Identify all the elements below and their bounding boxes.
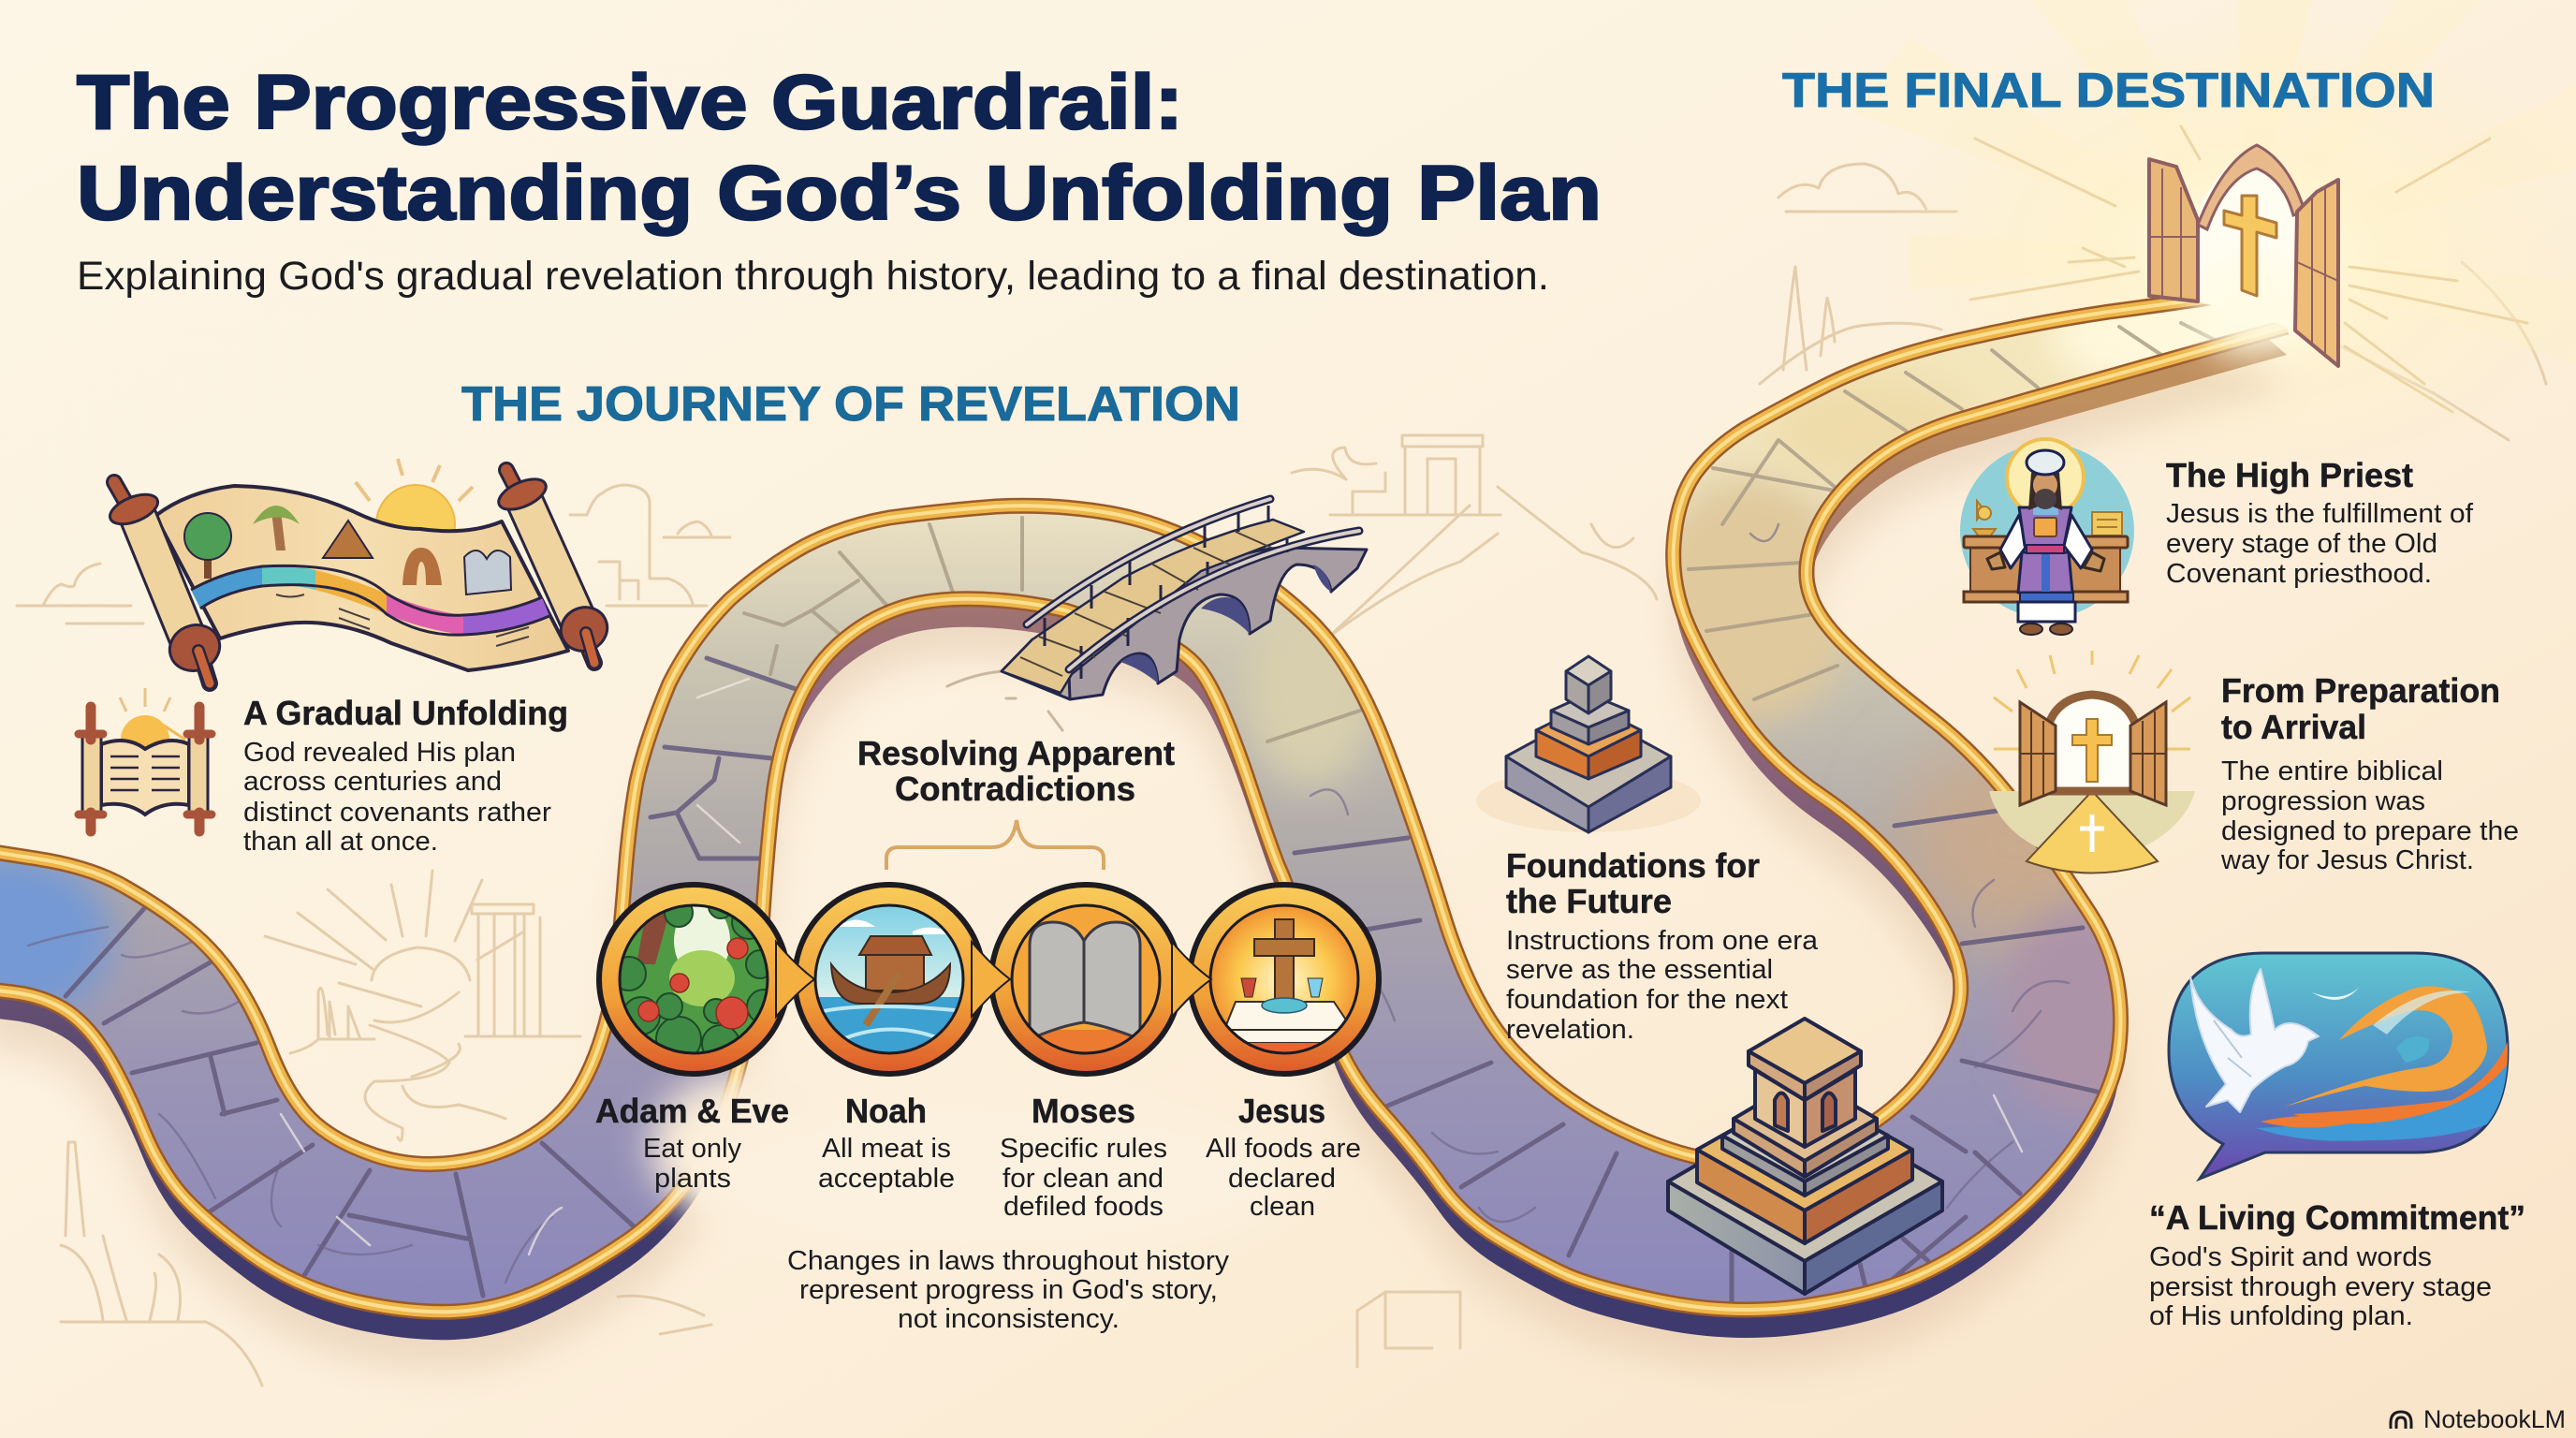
text block: the high priest: every stage of the Old: [2166, 529, 2437, 559]
NotebookLM watermark: NotebookLM: [2423, 1405, 2566, 1433]
subtitle: Explaining God's gradual revelation through history, leading to a final destination.: [77, 254, 1549, 299]
text block: foundations for the future: serve as the essential: [1506, 955, 1773, 985]
text block: a gradual unfolding: [243, 694, 568, 857]
stone cracks: [28, 524, 2069, 1283]
text block: the high priest: [2166, 456, 2474, 589]
text block: a gradual unfolding: God revealed His plan: [243, 738, 516, 768]
text block: a living commitment: [2149, 1198, 2525, 1331]
text block: from preparation to arrival: progression was: [2221, 786, 2425, 816]
stage label: Jesus: clean: [1250, 1192, 1315, 1222]
text block: foundations for the future: revelation.: [1506, 1015, 1634, 1045]
text block: changes in laws: not inconsistency.: [898, 1304, 1120, 1334]
gold road edges: [0, 292, 2287, 1312]
text block: foundations for the future: [1506, 846, 1819, 1045]
text block: from preparation to arrival: [2220, 671, 2519, 875]
stage label: Adam and Eve: Eat only: [643, 1134, 741, 1164]
text block: from preparation to arrival: to Arrival: [2221, 708, 2366, 746]
icon: small open door: [1989, 651, 2195, 873]
stage circle: Moses: [991, 885, 1211, 1074]
stone joints: tan sections: [744, 323, 2218, 741]
bridge: [947, 499, 1367, 730]
icon: small stacked foundation: [1476, 656, 1701, 832]
stage label: Jesus: declared: [1228, 1164, 1336, 1194]
cream field behind the timeline labels: [693, 1095, 1292, 1264]
icon: open book with rollers: [79, 688, 212, 831]
text block: a living commitment: persist through every stage: [2149, 1272, 2492, 1302]
icon: high priest: [1960, 439, 2134, 635]
stone joints: purple and grey sections: [66, 658, 2097, 1306]
section heading: final destination: THE FINAL DESTINATION: [1782, 64, 2435, 118]
stage label: Adam and Eve: Adam & Eve: [595, 1092, 789, 1130]
stage label: Moses: [1000, 1092, 1167, 1222]
text block: foundations for the future: foundation for the next: [1506, 985, 1788, 1015]
text block: from preparation to arrival: designed to prepare the: [2221, 816, 2519, 846]
heading: resolving apparent contradictions: Resolving Apparent: [857, 734, 1175, 772]
text block: the high priest: The High Priest: [2166, 456, 2413, 494]
stage label: Noah: All meat is: [822, 1134, 951, 1164]
stage label: Moses: for clean and: [1003, 1164, 1164, 1194]
stage label: Moses: Moses: [1032, 1092, 1135, 1130]
text block: from preparation to arrival: From Preparation: [2221, 671, 2500, 710]
stage circle: Adam and Eve: [599, 885, 814, 1074]
stage label: Noah: acceptable: [818, 1164, 955, 1194]
text block: a gradual unfolding: distinct covenants rather: [243, 798, 551, 828]
stage label: Moses: Specific rules: [1000, 1134, 1167, 1164]
text block: changes in laws: [787, 1246, 1230, 1334]
text block: from preparation to arrival: The entire biblical: [2221, 756, 2443, 786]
title: The Progressive Guardrail:: [77, 60, 1183, 145]
text block: from preparation to arrival: way for Jesus Christ.: [2220, 845, 2474, 875]
text block: changes in laws: represent progress in God's story,: [799, 1275, 1218, 1305]
stage circle: Jesus: [1190, 885, 1379, 1074]
text block: the high priest: Jesus is the fulfillment of: [2166, 499, 2474, 529]
text block: a gradual unfolding: across centuries and: [243, 767, 502, 797]
stage label: Jesus: [1206, 1092, 1361, 1222]
text block: changes in laws: Changes in laws throughout history: [787, 1246, 1230, 1276]
stage label: Adam and Eve: [595, 1092, 789, 1194]
bracket: [886, 820, 1104, 870]
large stepped pedestal on the road: [1668, 1019, 1942, 1294]
title: Understanding God’s Unfolding Plan: [77, 151, 1602, 236]
text block: a living commitment: “A Living Commitment”: [2149, 1198, 2525, 1237]
stage label: Noah: [818, 1092, 955, 1194]
title: [77, 60, 1602, 236]
stage label: Jesus: Jesus: [1238, 1092, 1325, 1130]
stage label: Adam and Eve: plants: [654, 1164, 731, 1194]
text block: a living commitment: God's Spirit and words: [2149, 1242, 2432, 1272]
text block: foundations for the future: the Future: [1506, 882, 1672, 920]
text block: the high priest: Covenant priesthood.: [2166, 559, 2432, 589]
stage label: Jesus: All foods are: [1206, 1134, 1361, 1164]
icon: large timeline scroll: [106, 459, 614, 683]
heading: resolving apparent contradictions: [857, 734, 1175, 808]
text block: a gradual unfolding: than all at once.: [243, 827, 438, 857]
stage label: Moses: defiled foods: [1003, 1192, 1164, 1222]
text block: foundations for the future: Instructions from one era: [1506, 926, 1819, 956]
stage circle: Noah: [795, 885, 1010, 1074]
door glow and rays: [1853, 0, 2576, 496]
heading: resolving apparent contradictions: Contradictions: [895, 770, 1135, 808]
section heading: journey: THE JOURNEY OF REVELATION: [461, 377, 1240, 432]
road fade behind labels: [651, 1072, 847, 1222]
text block: foundations for the future: Foundations for: [1506, 846, 1760, 885]
stage label: Noah: Noah: [845, 1092, 927, 1130]
icon: dove speech bubble: [2169, 953, 2518, 1179]
text block: a living commitment: of His unfolding plan.: [2149, 1301, 2413, 1331]
final destination door: [2149, 145, 2338, 366]
winding stone road: [0, 281, 2312, 1370]
text block: a gradual unfolding: A Gradual Unfolding: [243, 694, 568, 732]
